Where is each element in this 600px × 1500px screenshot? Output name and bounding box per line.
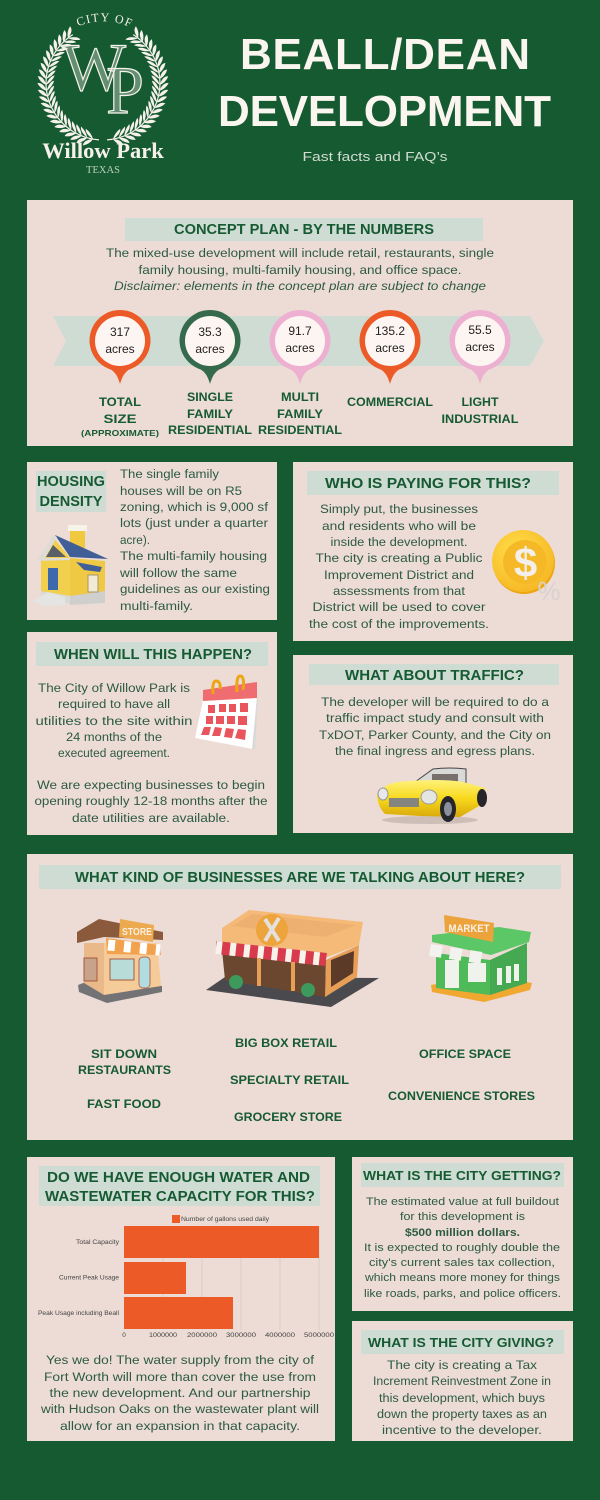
title — [218, 30, 551, 136]
bar chart: gallons used daily: 1000000 — [149, 1332, 177, 1339]
label: multi family residential: FAMILY — [277, 407, 323, 421]
label: office and convenience — [388, 1047, 535, 1103]
label: commercial: COMMERCIAL — [347, 395, 433, 409]
label: retail: GROCERY STORE — [234, 1110, 342, 1124]
bar chart: gallons used daily: Current Peak Usage — [59, 1274, 119, 1282]
legend: Number of gallons used daily — [181, 1216, 270, 1223]
label: total size: (APPROXIMATE) — [81, 428, 159, 438]
text: city giving: Increment Reinvestment Zone in — [373, 1374, 551, 1388]
pin: commercial: 135.2 — [375, 324, 405, 338]
pin: light industrial: 55.5 — [468, 323, 492, 337]
icon: restaurant — [206, 910, 379, 1007]
text: city giving — [373, 1358, 551, 1437]
text: who is paying: District will be used to cover — [312, 600, 486, 614]
text: who is paying: the cost of the improvements. — [309, 617, 489, 631]
text: when — [34, 681, 268, 825]
heading: water capacity: WASTEWATER CAPACITY FOR THIS? — [45, 1189, 315, 1205]
label: single family residential — [168, 390, 252, 437]
pin: light industrial: acres — [465, 340, 495, 354]
label: single family residential: FAMILY — [187, 407, 233, 421]
heading: city giving: WHAT IS THE CITY GIVING? — [368, 1335, 554, 1350]
label: multi family residential: RESIDENTIAL — [258, 423, 342, 437]
label: single family residential: SINGLE — [187, 390, 233, 404]
heading: concept plan — [125, 218, 483, 241]
panel: city giving — [352, 1321, 573, 1441]
heading: housing density — [36, 471, 106, 512]
monogram: WP: W — [62, 29, 127, 105]
bar chart: gallons used daily: 3000000 — [226, 1332, 257, 1339]
label: light industrial: LIGHT — [462, 395, 499, 409]
arrow band — [53, 316, 544, 366]
heading: water capacity — [39, 1166, 320, 1206]
pin: single family: 35.3 — [198, 325, 222, 339]
icon: store — [77, 919, 163, 1003]
text: city giving: incentive to the developer. — [382, 1423, 542, 1437]
bar chart: gallons used daily: 5000000 — [304, 1332, 335, 1339]
text: city getting: It is expected to roughly double the — [364, 1242, 560, 1254]
bar chart: gallons used daily — [38, 1215, 335, 1339]
text: concept intro — [106, 246, 494, 293]
text: housing density — [119, 467, 270, 613]
text: water answer: with Hudson Oaks on the wastewater plant will — [40, 1402, 319, 1416]
pin: commercial — [359, 310, 420, 384]
text: traffic — [319, 695, 551, 758]
bar chart: gallons used daily: 2000000 — [187, 1332, 218, 1339]
text: city getting: The estimated value at full buildout — [366, 1196, 560, 1208]
monogram: WP: P — [106, 52, 144, 128]
heading: city giving — [361, 1330, 564, 1354]
pin: total size: 317 — [110, 325, 130, 339]
heading: when: WHEN WILL THIS HAPPEN? — [54, 647, 252, 663]
label: office and convenience: OFFICE SPACE — [419, 1047, 511, 1061]
bar chart: gallons used daily: 4000000 — [265, 1332, 296, 1339]
monogram: WP — [62, 29, 144, 128]
label: single family residential: RESIDENTIAL — [168, 423, 252, 437]
text: city getting: like roads, parks, and police officers. — [364, 1288, 561, 1300]
pin: multi family — [270, 310, 330, 384]
text: water answer: allow for an expansion in that capacity. — [60, 1419, 300, 1433]
label: total size: SIZE — [104, 412, 136, 426]
label: restaurants: RESTAURANTS — [78, 1063, 171, 1077]
text: who is paying: Simply put, the businesses — [320, 502, 478, 516]
text: city getting: city's current sales tax collection, — [369, 1257, 555, 1269]
heading: traffic — [309, 664, 559, 685]
text: when: We are expecting businesses to begin — [37, 778, 265, 792]
text: city getting — [364, 1196, 561, 1300]
title: BEALL/DEAN — [240, 30, 530, 79]
heading: concept plan: CONCEPT PLAN - BY THE NUMBERS — [174, 222, 434, 238]
icon: car — [377, 768, 487, 824]
text: housing density: The multi-family housing — [120, 549, 267, 563]
text: who is paying: The city is creating a Public — [316, 551, 482, 565]
text: city getting: $500 million dollars. — [405, 1227, 520, 1239]
icon: laurel wreath — [24, 26, 182, 162]
label: restaurants: FAST FOOD — [87, 1097, 161, 1111]
label: office and convenience: CONVENIENCE STORES — [388, 1089, 535, 1103]
text: housing density: multi-family. — [120, 599, 193, 613]
text: when: utilities to the site within — [36, 714, 193, 728]
text: water answer: Yes we do! The water supply from the city of — [46, 1353, 315, 1367]
label: light industrial — [442, 395, 518, 426]
logo text: city of: CITY OF — [76, 13, 132, 26]
text: water answer — [40, 1353, 319, 1433]
text: city giving: this development, which buys — [379, 1391, 545, 1405]
pin: commercial: acres — [375, 341, 405, 355]
label: total size — [81, 395, 159, 438]
pin: light industrial — [449, 310, 510, 384]
bar chart: gallons used daily: Total Capacity — [76, 1239, 120, 1246]
heading: when — [36, 642, 268, 666]
icon: house — [32, 525, 108, 606]
text: when: The City of Willow Park is — [38, 681, 190, 695]
icon: coin: % — [537, 576, 561, 606]
title: DEVELOPMENT — [218, 87, 551, 136]
text: city getting: which means more money for things — [364, 1272, 560, 1284]
heading: city getting — [361, 1163, 564, 1187]
logo text: Willow Park: Willow Park — [42, 138, 164, 163]
text: who is paying: Improvement District and — [324, 568, 474, 582]
text: city giving: down the property taxes as an — [377, 1407, 547, 1421]
text: water answer: Fort Worth will more than cover the use from — [44, 1370, 316, 1384]
pin: total size: acres — [105, 342, 135, 356]
bar chart: gallons used daily: 0 — [122, 1332, 126, 1339]
icon: market — [430, 915, 532, 1002]
icon: calendar — [195, 676, 258, 749]
pin: multi family: acres — [285, 341, 315, 355]
subtitle: Fast facts and FAQ’s — [302, 149, 448, 164]
label: light industrial: INDUSTRIAL — [442, 412, 518, 426]
pin: total size — [89, 310, 150, 384]
pin: single family: acres — [195, 342, 225, 356]
text: housing density: zoning, which is 9,000 sf — [120, 500, 269, 514]
panel: concept plan — [27, 200, 573, 446]
text: concept intro: Disclaimer: elements in the concept plan are subject to change — [114, 279, 486, 293]
logo: City of Willow Park — [37, 13, 169, 176]
icon: market: MARKET — [448, 923, 490, 935]
text: traffic: The developer will be required to do a — [321, 695, 549, 709]
text: housing density: acre). — [120, 533, 150, 547]
panel: city getting — [352, 1157, 573, 1311]
text: housing density: will follow the same — [119, 566, 237, 580]
panel: water capacity — [27, 1157, 335, 1441]
icon: coin — [492, 530, 561, 606]
heading: who is paying: WHO IS PAYING FOR THIS? — [325, 476, 531, 492]
text: concept intro: The mixed-use development will include retail, restaurants, single — [106, 246, 494, 260]
heading: businesses — [39, 865, 561, 889]
label: multi family residential: MULTI — [281, 390, 319, 404]
text: housing density: guidelines as our existing — [120, 582, 270, 596]
panel: businesses — [27, 854, 573, 1140]
panel: housing density — [27, 462, 277, 620]
panel: traffic — [293, 655, 573, 833]
heading: city getting: WHAT IS THE CITY GETTING? — [363, 1168, 561, 1183]
text: water answer: the new development. And our partnership — [50, 1386, 311, 1400]
text: housing density: lots (just under a quarter — [120, 516, 268, 530]
heading: housing density: DENSITY — [40, 494, 103, 510]
heading: traffic: WHAT ABOUT TRAFFIC? — [345, 668, 524, 684]
text: traffic: TxDOT, Parker County, and the City on — [319, 728, 551, 742]
heading: water capacity: DO WE HAVE ENOUGH WATER AND — [47, 1170, 310, 1186]
heading: housing density: HOUSING — [37, 474, 105, 490]
text: when: opening roughly 12-18 months after the — [34, 794, 268, 808]
text: traffic: the final ingress and egress plans. — [335, 744, 535, 758]
text: housing density: The single family — [120, 467, 220, 481]
label: multi family residential — [258, 390, 342, 437]
text: housing density: houses will be on R5 — [120, 484, 242, 498]
panel: who is paying — [293, 462, 573, 641]
pin: multi family: 91.7 — [288, 324, 312, 338]
icon: coin: $ — [514, 539, 537, 586]
text: who is paying: inside the development. — [330, 535, 468, 549]
logo text: Texas: TEXAS — [86, 165, 120, 176]
text: when: executed agreement. — [58, 746, 170, 760]
text: when: required to have all — [58, 697, 170, 711]
label: restaurants: SIT DOWN — [91, 1047, 157, 1061]
heading: who is paying — [307, 471, 559, 495]
text: who is paying — [309, 502, 489, 631]
heading: businesses: WHAT KIND OF BUSINESSES ARE WE TALKING ABOUT HERE? — [75, 870, 525, 886]
text: who is paying: assessments from that — [333, 584, 466, 598]
icon: store: STORE — [122, 927, 152, 938]
panel: when will this happen — [27, 632, 277, 835]
text: city getting: for this development is — [400, 1211, 525, 1223]
label: total size: TOTAL — [99, 395, 141, 409]
text: when: date utilities are available. — [72, 811, 230, 825]
label: retail: BIG BOX RETAIL — [235, 1036, 337, 1050]
bar chart: gallons used daily: Peak Usage including Beall — [38, 1310, 119, 1317]
label: retail: SPECIALTY RETAIL — [230, 1073, 349, 1087]
text: who is paying: and residents who will be — [322, 519, 476, 533]
text: traffic: traffic impact study and consult with — [326, 711, 544, 725]
text: concept intro: family housing, multi-family housing, and office space. — [138, 263, 462, 277]
text: when: 24 months of the — [66, 730, 162, 744]
text: city giving: The city is creating a Tax — [387, 1358, 538, 1372]
pin: single family — [179, 310, 240, 384]
label: retail — [230, 1036, 349, 1124]
label: restaurants — [78, 1047, 171, 1111]
